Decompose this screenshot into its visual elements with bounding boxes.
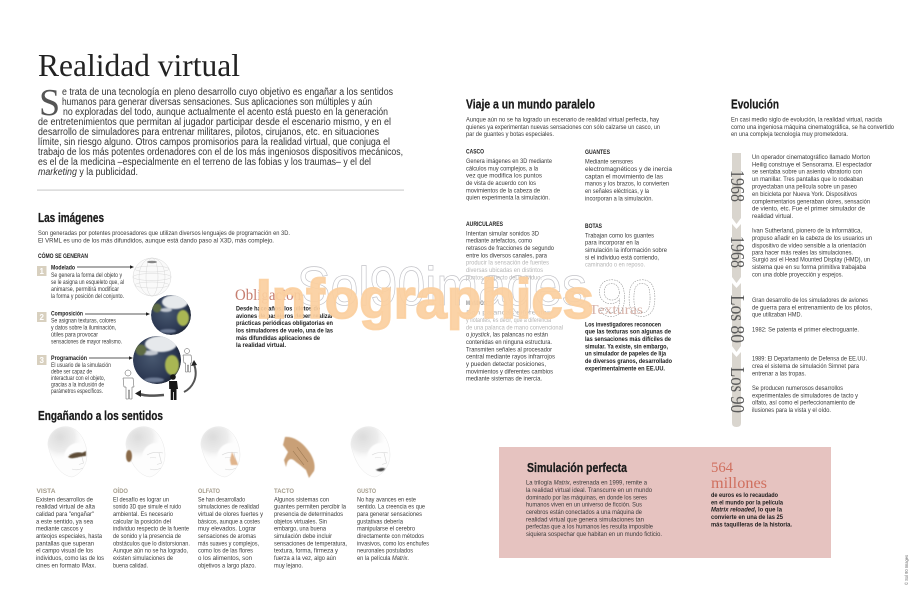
item: guantes: manos y los brazos, lo convierten — [585, 181, 669, 188]
item: casco: movimientos de la cabeza de — [466, 187, 540, 194]
item: guantes: GUANTES — [585, 150, 610, 156]
item: joystick: y flotantes, es decir, que a diferencia — [466, 317, 551, 324]
timeline text: sensorama: de viento, etc. Fue el primer simulador de — [752, 206, 865, 213]
column: olfato: simulaciones de realidad — [198, 504, 259, 511]
step 2: composición: 2 — [40, 313, 44, 322]
step 3: programación: El usuario de la simulación — [51, 362, 111, 369]
callout: obligación: Desde hace años, los pilotos de — [236, 306, 320, 312]
column: vista: mediante cascos y — [36, 526, 84, 533]
column: vista: individuos, como las de los — [36, 555, 105, 562]
description — [731, 116, 894, 138]
column: gusto: gustativas debería — [357, 518, 403, 525]
column: vista: el campo visual de los — [36, 548, 94, 555]
timeline text: los 90: ilusiones para la vista y el oído. — [752, 407, 831, 414]
callout: texturas: Texturas — [589, 303, 643, 318]
column: olfato: básicos, aunque a costes — [198, 518, 261, 525]
item: joystick: contenidas en ninguna estructura. — [466, 339, 552, 346]
intro text block: es el de la medicina –especialmente en el terreno de las fobias y los traumas– y el del — [38, 157, 371, 168]
section: evolución — [726, 96, 894, 427]
arrow — [77, 266, 130, 268]
callout text: en el mundo por la película — [711, 499, 783, 506]
timeline bar — [732, 153, 741, 427]
intro text block: límite, sin riesgo alguno. Otros campos promisorios para la realidad virtual, que conjuga el — [38, 137, 390, 148]
item: joystick: y pueden detectar posiciones, — [466, 361, 546, 368]
item: joystick: mediante sistemas de inercia. — [466, 376, 542, 383]
panel text: cerebros están conectados a una máquina de — [526, 509, 642, 516]
column: tacto — [274, 489, 347, 569]
callout: obligación: aviones de pasajeros deben realizar — [236, 313, 333, 320]
column: tacto: guantes permiten percibir la — [274, 504, 346, 511]
column: gusto: No hay avances en este — [357, 496, 416, 503]
step 3: programación: parámetros específicos. — [51, 388, 103, 395]
column: gusto: invasivos, como los enchufes — [357, 540, 430, 547]
column: olfato: Se han desarrollado — [198, 496, 245, 503]
item: auriculares: retrasos de fracciones de segundo — [466, 245, 554, 252]
watermark: outlined text: 90 — [597, 270, 657, 328]
timeline text: los 90: olfato, así como el perfeccionamiento de — [752, 400, 855, 407]
item: casco: vez que modifica los puntos — [466, 173, 543, 180]
heading: Engañando a los sentidos — [38, 408, 163, 423]
section: viaje a un mundo paralelo — [466, 96, 672, 383]
timeline text: los 80: de guerra para el entrenamiento de los pilotos, — [752, 304, 872, 311]
step 3: programación: Programación — [51, 356, 87, 362]
step 1: modelado: animarse, permitirá modificar — [51, 286, 120, 293]
item: casco — [466, 150, 552, 202]
icon: face vista — [48, 427, 87, 477]
item: botas: caminando o en reposo. — [585, 262, 645, 269]
timeline text: los 80: 1982: Se patenta el primer electroguante. — [752, 326, 859, 333]
description — [38, 230, 290, 244]
intro text block: desarrollo de simuladores para entrenar militares, pilotos, cirujanos, etc. en situaciones — [38, 127, 379, 138]
column: tacto: embargo, una buena — [274, 526, 326, 533]
timeline text: sensorama: en bicicleta por Nueva York. Dispositivos — [752, 191, 858, 198]
step 2: composición: sensaciones de mayor realismo. — [51, 338, 122, 346]
timeline text: sensorama: realidad virtual. — [752, 213, 793, 220]
column: vista: VISTA — [36, 489, 56, 495]
item: casco: Genera imágenes en 3D mediante — [466, 158, 552, 165]
title: Realidad virtual — [38, 47, 240, 83]
panel text: realidad virtual que genera simulaciones tan — [526, 516, 644, 523]
intro text block: marketing y la publicidad. — [38, 167, 138, 178]
column: tacto: fuerza a la vez, algo aún — [274, 555, 336, 562]
icon: textured earth with users — [123, 336, 197, 400]
timeline label: los 90: Los 90 — [726, 367, 748, 413]
callout: texturas: las sensaciones más difíciles de — [585, 336, 671, 343]
item: joystick: Transmiten señales al procesador — [466, 346, 553, 353]
column: gusto: en la película Matrix. — [357, 555, 409, 562]
item: guantes: incorporan a la simulación. — [585, 195, 653, 202]
column: olfato: muy elevados. Lograr — [198, 526, 257, 533]
column: olfato — [198, 489, 264, 569]
callout: texturas: experimentalmente en EE.UU. — [585, 365, 665, 372]
heading: Las imágenes — [38, 210, 104, 225]
column: vista: pantallas que superan — [36, 540, 94, 547]
column: vista: cines en formato IMax. — [36, 562, 96, 569]
column: gusto: neuronales postulados — [357, 548, 414, 555]
intro text block — [38, 82, 403, 178]
description — [466, 116, 660, 138]
step 1: modelado: Se genera la forma del objeto y — [51, 272, 123, 279]
icon: hand tacto — [283, 437, 315, 478]
timeline label: 1968: 1968 — [726, 170, 748, 202]
timeline text: sutherland: Ivan Sutherland, pionero de la informática, — [752, 228, 862, 235]
item: auriculares: Intentan simular sonidos 3D — [466, 230, 539, 237]
panel text: perfectas que a los humanos les resulta imposible — [526, 524, 653, 531]
timeline text: sensorama — [752, 154, 873, 220]
icon: face olfato — [201, 427, 240, 477]
panel text: dominado por las máquinas, en donde los seres — [526, 494, 648, 501]
item: casco: cálculos muy complejos, a la — [466, 165, 538, 172]
icon: white figure left — [123, 370, 134, 399]
arrow — [85, 313, 146, 315]
column: vista: Existen desarrollos de — [36, 496, 93, 503]
icon: textured earth — [151, 295, 191, 335]
column: gusto: directamente con métodos — [357, 533, 425, 540]
column: gusto: GUSTO — [357, 489, 376, 495]
timeline text: sutherland: Surgió así el Head Mounted Display (HMD), un — [752, 257, 870, 264]
timeline text: sutherland: con una doble proyección y espejos. — [752, 271, 843, 278]
item: botas: BOTAS — [585, 224, 602, 230]
arrow: rotation right — [184, 364, 196, 392]
item: joystick: central mediante rayos infrarrojos — [466, 354, 556, 361]
callout: obligación: Obligación — [235, 287, 301, 304]
callout: obligación: prácticas periódicas obligatorias en — [236, 320, 333, 327]
item: guantes: electromagnéticos y de inercia — [585, 166, 672, 173]
timeline text: los 90: entrenar a las tropas. — [752, 370, 806, 377]
column: tacto: Algunos sistemas con — [274, 496, 329, 503]
column: oído: existen simulaciones de — [113, 555, 173, 562]
timeline text: sutherland: para hacer más reales las simulaciones. — [752, 250, 853, 257]
column: oído: El desafío es lograr un — [113, 496, 169, 503]
watermark: orange text: Infographics — [256, 267, 594, 330]
step 3: programación: debe ser capaz de — [51, 368, 92, 376]
timeline text: sensorama: proyectaban una película sobre un paseo — [752, 183, 857, 190]
column: tacto: simulación debe incluir — [274, 533, 333, 540]
column: olfato: o los alimentos, son — [198, 555, 252, 562]
column: tacto: textura, forma, firmeza y — [274, 548, 339, 555]
column: vista: a este sentido, ya sea — [36, 518, 93, 525]
column: oído: obstáculos que lo distorsionan. — [113, 540, 190, 547]
column: olfato: virtual de olores fuertes y — [198, 511, 264, 518]
timeline text: sutherland — [752, 228, 872, 278]
column: olfato: como los de las flores — [198, 548, 254, 555]
description: en una compleja tecnología muy prometedora. — [731, 131, 848, 138]
step 3: programación: 3 — [40, 356, 44, 365]
step 3: programación: gracias a la inclusión de — [51, 382, 104, 388]
column: gusto: manipularse el cerebro — [357, 526, 415, 533]
step 3: programación: interactuar con el objeto, — [51, 375, 105, 382]
callout text: más taquilleras de la historia. — [711, 521, 792, 528]
item: auriculares: producir la sensación de fuentes — [466, 260, 550, 267]
callout: texturas: Los investigadores reconocen — [585, 321, 661, 328]
step 2: composición: y datos sobre la iluminación, — [51, 324, 116, 332]
item: auriculares: mediante artefactos, como — [466, 238, 532, 245]
item: botas — [585, 224, 667, 269]
column: oído: OÍDO — [113, 487, 128, 495]
item: joystick: movimientos y diferentes cambios — [466, 368, 554, 375]
intro text block: e trata de una tecnología en pleno desarrollo cuyo objetivo es engañar a los sentidos — [62, 87, 393, 98]
timeline label: 1968: 1968 — [726, 236, 748, 268]
step 2: composición: útiles para provocar — [51, 332, 99, 338]
item: guantes: Mediante sensores — [585, 158, 634, 166]
heading: Viaje a un mundo paralelo — [466, 96, 595, 112]
timeline text: los 90: Se producen numerosos desarrollos — [752, 385, 844, 392]
item: joystick — [466, 301, 563, 383]
column: tacto: muy lejano. — [274, 562, 303, 569]
big number: 564 millones: 564 — [711, 460, 733, 476]
item: joystick: o joystick, las palancas no están — [466, 332, 548, 339]
item: guantes: captan el movimiento de las — [585, 173, 664, 180]
item: botas: si el individuo está corriendo, — [585, 254, 659, 261]
column: tacto: TACTO — [274, 489, 294, 495]
callout: texturas: que las texturas son algunas de — [585, 329, 671, 336]
column: tacto: presencia de determinados — [274, 511, 344, 518]
item: guantes — [585, 150, 672, 202]
big number: 564 millones: millones — [711, 475, 767, 492]
column: oído: individuo respecto de la fuente — [113, 526, 189, 533]
timeline text: sutherland: propuso añadir en la cabeza de los usuarios un — [752, 235, 872, 242]
item: joystick: MANDOS — [466, 301, 487, 307]
heading: Simulación perfecta — [527, 460, 628, 475]
step 2: composición — [37, 312, 122, 346]
timeline text: sensorama: Heilig construye el Sensorama. El espectador — [752, 161, 873, 168]
column: olfato: objetivos a largo plazo. — [198, 562, 256, 569]
callout: obligación: la realidad virtual. — [236, 342, 286, 349]
big number: 564 millones — [711, 460, 767, 492]
column: vista: anteojos especiales, hasta — [36, 533, 102, 540]
icon: face oído — [126, 427, 165, 477]
intro text block: no exploradas del todo, aunque actualmente el acento está puesto en la generación — [63, 107, 388, 118]
timeline text: sensorama: complementarios generaban olores, sensación — [752, 198, 870, 205]
item: guantes: en señales eléctricas, y la — [585, 188, 649, 195]
column: olfato: más suaves y complejos, — [198, 540, 259, 547]
timeline text: sutherland: dispositivo de vídeo sensible a la orientación — [752, 242, 866, 249]
column: olfato: OLFATO — [198, 489, 220, 495]
credit: © Sol 90 Images — [903, 554, 909, 585]
step 2: composición: Composición — [51, 312, 83, 318]
item: auriculares: diversas ubicadas en distintos — [466, 267, 544, 274]
icon: wireframe sphere — [133, 258, 171, 296]
step 1: modelado — [37, 266, 124, 300]
item: botas: simulación la información sobre — [585, 247, 667, 254]
item: auriculares: entre los diversos canales, para — [466, 252, 547, 259]
intro text block: de entretenimientos que permitan al jugador participar desde el escenario mismo, y en el — [38, 117, 391, 128]
item: auriculares — [466, 222, 554, 281]
intro text block: trabajo de los más potentes ordenadores con el de los más ingeniosos dispositivos mecánicos, — [38, 147, 403, 158]
timeline text: sensorama: un manillar. Tres pantallas que lo rodeaban — [752, 176, 863, 183]
drop cap: S — [39, 82, 60, 124]
column: oído: Aunque aún no se ha logrado, — [113, 548, 188, 555]
heading: Evolución — [731, 96, 779, 112]
column: vista: calidad para "engañar" — [36, 511, 95, 518]
timeline text: los 90: crea el sistema de simulación Simnet para — [752, 363, 859, 370]
column: oído: de sonido y la presencia de — [113, 533, 181, 540]
item: botas: Trabajan como los guantes — [585, 232, 655, 239]
timeline text: los 80: que utilizaban HMD. — [752, 312, 802, 319]
callout: texturas: un simulador de papeles de lija — [585, 351, 666, 358]
item: casco: quien experimenta la simulación. — [466, 195, 550, 202]
timeline text: sensorama: se sentaba sobre un asiento vibratorio con — [752, 169, 862, 176]
column: oído: ambiental. Es necesario — [113, 511, 173, 518]
watermark: outlined text: Sol90images — [297, 255, 587, 317]
callout text: Matrix reloaded, lo que la — [711, 507, 782, 514]
subheading: CÓMO SE GENERAN — [38, 252, 88, 260]
timeline text: sensorama: Un operador cinematográfico llamado Morton — [752, 154, 870, 161]
panel text: La trilogía Matrix, estrenada en 1999, remite a — [526, 480, 647, 487]
section: las imágenes — [37, 210, 290, 400]
intro text block: humanos para generar diversas sensaciones. Sus aplicaciones son múltiples y aún — [62, 97, 372, 108]
column: olfato: sensaciones de aromas — [198, 533, 257, 540]
column: gusto — [357, 489, 430, 562]
column: oído: sonido 3D que simule el ruido — [113, 504, 181, 511]
callout: obligación: más difundidas aplicaciones de — [236, 335, 320, 342]
item: auriculares: AURICULARES — [466, 222, 503, 228]
column: vista — [36, 489, 105, 569]
item: joystick: de una palanca de mano convencional — [466, 324, 563, 331]
description: El VRML es uno de los más difundidos, aunque está dando paso al X3D, más complejo. — [38, 238, 274, 244]
column: oído: buena calidad. — [113, 562, 148, 569]
panel: simulación perfecta — [499, 447, 831, 558]
step 2: composición: Se asignan texturas, colores — [51, 318, 117, 324]
timeline text: los 80 — [752, 297, 872, 333]
timeline text: sutherland: sistema que en su forma primitiva trabajaba — [752, 264, 866, 271]
icon: black figure — [169, 374, 178, 400]
callout: texturas: de diversos granos, desarrollado — [585, 358, 672, 365]
section: engañando a los sentidos — [36, 408, 430, 569]
callout: texturas — [585, 303, 672, 372]
column: tacto: sensaciones de temperatura, — [274, 540, 347, 547]
item: casco: de vista de acuerdo con los — [466, 180, 537, 187]
column: gusto: para generar sensaciones — [357, 511, 423, 518]
step 3: programación — [37, 355, 111, 395]
step 1: modelado: se le asigna un esqueleto que, al — [51, 279, 124, 286]
callout: texturas: simular. Ya existe, sin embargo, — [585, 343, 668, 350]
description: Son generadas por potentes procesadores que utilizan diversos lenguajes de programación en 3D. — [38, 230, 290, 237]
description: como una ingeniosa máquina cinematográfica, se ha convertido — [731, 124, 894, 131]
panel text: la realidad virtual ideal. Transcurre en un mundo — [526, 487, 652, 494]
arrow — [89, 357, 129, 359]
step 1: modelado: 1 — [40, 267, 44, 276]
panel text: siquiera sospechar que habitan en un mundo ficticio. — [526, 531, 662, 538]
step 1: modelado: Modelado — [51, 266, 75, 272]
step 1: modelado: la forma y posición del conjunto. — [51, 293, 124, 300]
callout: obligación: los simuladores de vuelo, una de las — [236, 328, 333, 334]
column: vista: realidad virtual de alta — [36, 504, 95, 511]
arrow: rotation bottom — [139, 394, 164, 396]
callout text: de euros es lo recaudado — [711, 492, 778, 499]
timeline text: los 80: Gran desarrollo de los simuladores de aviones — [752, 297, 869, 304]
timeline text: los 90 — [752, 356, 867, 414]
panel text: humanos viven en un universo de ficción. Sus — [526, 502, 643, 509]
callout: obligación — [235, 287, 333, 349]
timeline text: los 90: 1989: El Departamento de Defensa de EE.UU. — [752, 356, 867, 363]
timeline label: los 80: Los 80 — [726, 295, 748, 343]
description: quienes ya experimentan nuevas sensaciones con sólo calzarse un casco, un — [466, 124, 660, 131]
icon: white figure right — [183, 348, 192, 372]
timeline text: los 90: experimentales de simuladores de tacto y — [752, 392, 859, 399]
description: par de guantes y botas especiales. — [466, 131, 554, 138]
column: oído: calcular la posición del — [113, 518, 171, 525]
column: tacto: objetos virtuales. Sin — [274, 518, 327, 525]
callout text: convierte en una de las 25 — [711, 514, 783, 521]
panel text — [526, 480, 662, 538]
callout text — [711, 492, 792, 528]
item: joystick: Son palancas diferentes — [466, 310, 552, 317]
description: Aunque aún no se ha logrado un escenario de realidad virtual perfecta, hay — [466, 116, 660, 124]
item: botas: para incorporar en la — [585, 240, 639, 247]
icon: face gusto — [351, 427, 390, 477]
description: En casi medio siglo de evolución, la realidad virtual, nacida — [731, 116, 882, 124]
column: oído — [113, 487, 190, 569]
item: casco: CASCO — [466, 150, 484, 156]
column: gusto: sentido. La creencia es que — [357, 504, 425, 511]
item: auriculares: puntos, respecto del individuo. — [466, 274, 542, 281]
